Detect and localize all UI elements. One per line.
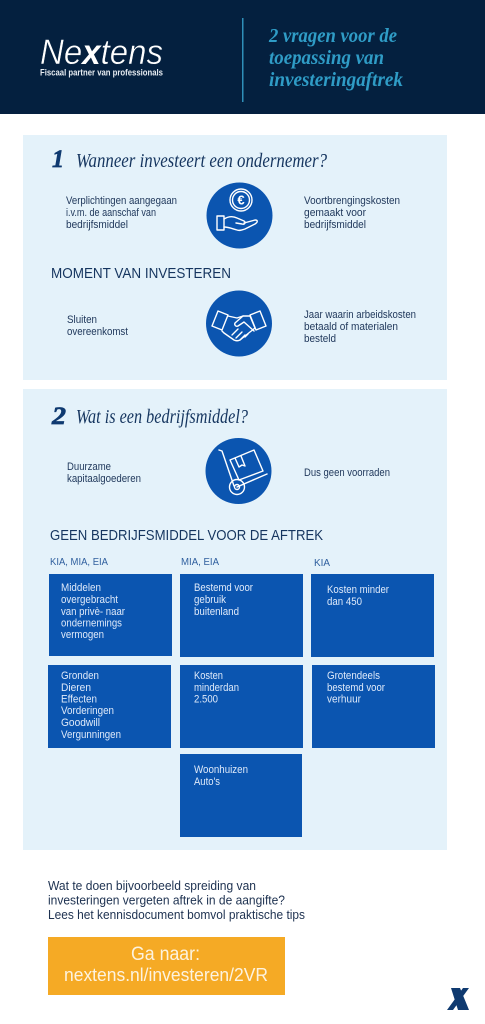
box: middelen overgebracht: ondernemings (61, 618, 123, 630)
box: kosten minderdan 2.500: 2.500 (194, 694, 218, 706)
icon: hand truck with box (206, 438, 272, 504)
logo: Nextens: Nextens (40, 33, 163, 72)
title (268, 25, 403, 91)
text: dus geen voorraden: Dus geen voorraden (304, 467, 390, 479)
text: closing paragraph: investeringen vergeten aftrek in de aangifte? (48, 894, 285, 908)
box: middelen overgebracht: Middelen (61, 582, 101, 594)
text: verplichtingen: bedrijfsmiddel (66, 219, 128, 231)
header band (0, 0, 485, 114)
heading: question 2: Wat is een bedrijfsmiddel? (76, 406, 248, 428)
text: verplichtingen: i.v.m. de aanschaf van (66, 207, 156, 219)
box: kosten minder dan 450: dan 450 (327, 596, 362, 608)
heading: question 1: 1 (52, 146, 64, 173)
text: closing paragraph: Wat te doen bijvoorbeeld spreiding van (48, 879, 256, 893)
icon: hand with euro coin (206, 182, 272, 248)
box: grotendeels bestemd voor verhuur: bestemd voor (327, 682, 385, 694)
heading: moment van investeren: MOMENT VAN INVESTEREN (51, 266, 231, 282)
box: bestemd voor gebruik buitenland: gebruik (194, 594, 227, 606)
box: middelen overgebracht: overgebracht (61, 594, 118, 606)
call to action button: nextens.nl/investeren/2VR (64, 965, 268, 985)
panel: question 1 (23, 135, 447, 380)
box: bestemd voor gebruik buitenland (180, 574, 303, 657)
text: verplichtingen (66, 195, 177, 231)
box: grotendeels bestemd voor verhuur (312, 665, 435, 748)
text: sluiten overeenkomst: overeenkomst (67, 326, 128, 338)
text: voortbrengingskosten (304, 195, 400, 231)
box: gronden dieren effecten: Goodwill (61, 717, 100, 729)
call to action button (48, 937, 285, 995)
title: 2 vragen voor de (268, 25, 397, 47)
panel: question 2 (23, 389, 447, 850)
text: duurzame kapitaalgoederen: Duurzame (67, 461, 111, 473)
title: toepassing van (269, 47, 384, 69)
logo: Nextens: Fiscaal partner van professionals (40, 68, 163, 78)
box: bestemd voor gebruik buitenland: Bestemd voor (194, 582, 253, 594)
text: duurzame kapitaalgoederen: kapitaalgoederen (67, 473, 141, 485)
box: grotendeels bestemd voor verhuur: Grotendeels (327, 670, 381, 682)
heading: geen bedrijfsmiddel: GEEN BEDRIJFSMIDDEL VOOR DE AFTREK (50, 528, 323, 544)
label: MIA, EIA: MIA, EIA (181, 557, 219, 568)
text: voortbrengingskosten: Voortbrengingskosten (304, 195, 400, 207)
text: jaar waarin arbeidskosten: besteld (304, 333, 336, 345)
heading: question 1: Wanneer investeert een ondernemer? (76, 150, 327, 172)
heading: question 2 (51, 403, 248, 430)
box: kosten minderdan 2.500: minderdan (194, 682, 239, 694)
box: gronden dieren effecten (48, 665, 171, 748)
box: middelen overgebracht: van privè- naar (61, 606, 125, 618)
text: jaar waarin arbeidskosten: Jaar waarin arbeidskosten (304, 309, 416, 321)
box: kosten minderdan 2.500: Kosten (194, 670, 223, 682)
box: gronden dieren effecten: Vergunningen (61, 729, 121, 741)
title: investeringaftrek (269, 69, 403, 91)
box: woonhuizen auto's: Woonhuizen (194, 764, 248, 776)
box: middelen overgebracht (49, 574, 172, 656)
heading: question 2: 2 (51, 403, 66, 430)
text: jaar waarin arbeidskosten: betaald of materialen (304, 321, 398, 333)
text: closing paragraph (48, 879, 305, 922)
box: kosten minder dan 450 (311, 574, 434, 657)
box: woonhuizen auto's: Auto's (194, 776, 221, 788)
box: kosten minder dan 450: Kosten minder (327, 584, 389, 596)
box: grotendeels bestemd voor verhuur: verhuur (327, 694, 361, 706)
box: kosten minderdan 2.500 (180, 665, 303, 748)
heading: question 1 (52, 146, 327, 173)
box: bestemd voor gebruik buitenland: buitenland (194, 606, 239, 618)
label: KIA, MIA, EIA: KIA, MIA, EIA (50, 557, 108, 568)
text: verplichtingen: Verplichtingen aangegaan (66, 195, 177, 207)
box: gronden dieren effecten: Dieren (61, 682, 91, 694)
icon: Nextens X mark (447, 988, 469, 1010)
text: sluiten overeenkomst: Sluiten (67, 314, 97, 326)
box: woonhuizen auto's (180, 754, 302, 837)
text: duurzame kapitaalgoederen (67, 461, 141, 485)
call to action button: Ga naar: (131, 944, 200, 965)
box: middelen overgebracht: vermogen (61, 629, 104, 641)
text: voortbrengingskosten: gemaakt voor (304, 207, 366, 219)
label: KIA: KIA (314, 558, 330, 569)
icon: hand with euro coin: € (237, 192, 245, 208)
text: sluiten overeenkomst (67, 314, 128, 338)
icon: handshake (206, 290, 272, 356)
box: gronden dieren effecten: Effecten (61, 694, 97, 706)
box: gronden dieren effecten: Vorderingen (61, 705, 114, 717)
box: gronden dieren effecten: Gronden (61, 670, 99, 682)
text: jaar waarin arbeidskosten (304, 309, 416, 345)
text: voortbrengingskosten: bedrijfsmiddel (304, 219, 366, 231)
text: closing paragraph: Lees het kennisdocument bomvol praktische tips (48, 908, 305, 922)
